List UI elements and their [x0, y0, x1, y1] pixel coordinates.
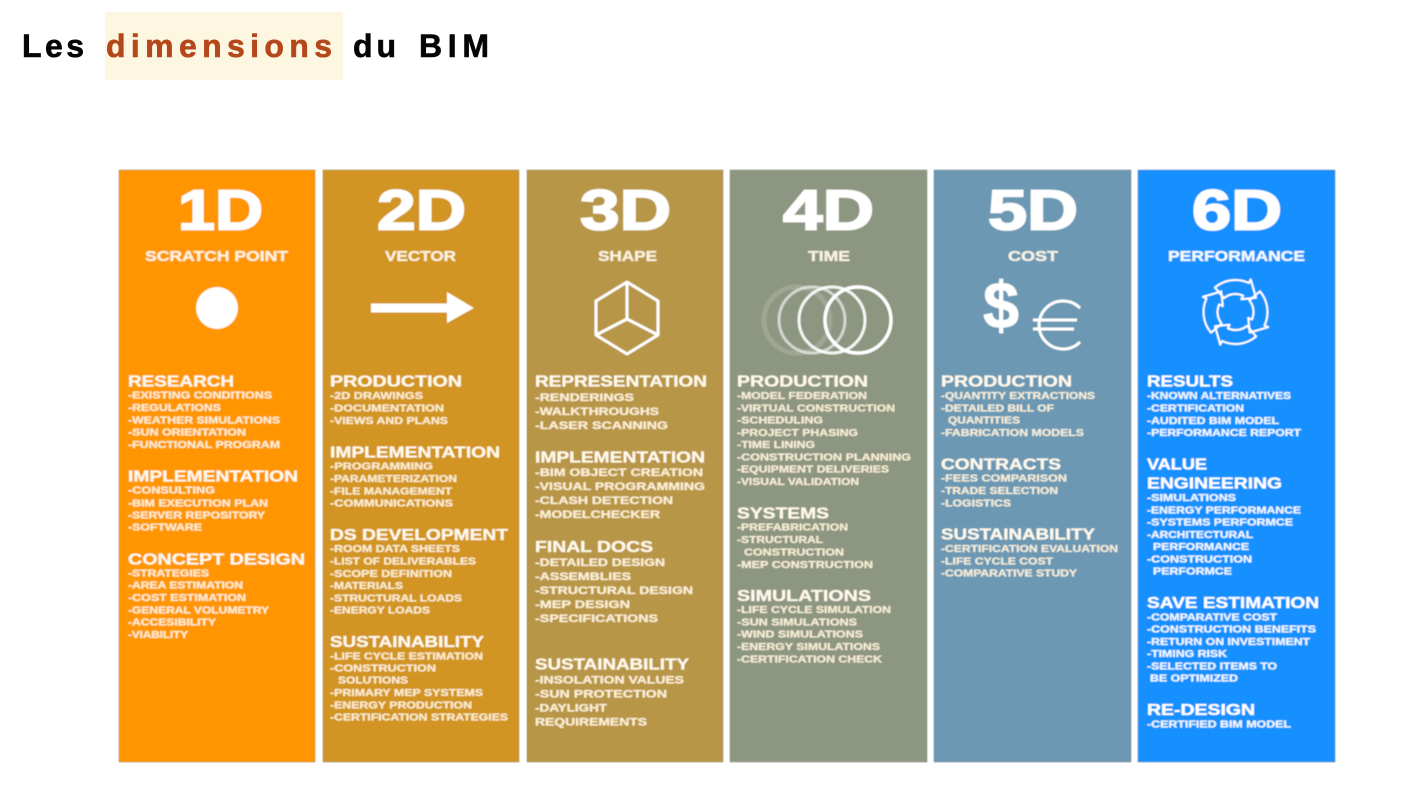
section: save estimation: -CONSTRUCTION BENEFITS — [1147, 625, 1316, 636]
panel background 4D — [730, 170, 927, 762]
section: save estimation: -TIMING RISK — [1147, 649, 1228, 660]
section: contracts: -TRADE SELECTION — [941, 486, 1058, 497]
panel: 4D time — [730, 170, 927, 762]
icon: cycle arrows — [1203, 279, 1268, 345]
section: production: -FABRICATION MODELS — [941, 428, 1084, 439]
section: sustainability: -ENERGY PRODUCTION — [330, 701, 472, 712]
section: research — [128, 374, 280, 451]
section: final docs: -ASSEMBLIES — [535, 571, 631, 583]
heading 1D: 1D — [178, 178, 263, 242]
section: value engineering: PERFORMANCE — [1153, 542, 1249, 553]
section: final docs: FINAL DOCS — [535, 539, 653, 556]
section: DS development: -SCOPE DEFINITION — [330, 569, 452, 580]
section: sustainability: SUSTAINABILITY — [535, 657, 690, 674]
icon: overlapping rings — [764, 287, 891, 353]
section: concept design: -COST ESTIMATION — [128, 593, 246, 604]
section: save estimation: -COMPARATIVE COST — [1147, 613, 1277, 624]
panel: 5D cost — [934, 170, 1131, 762]
section: DS development — [330, 527, 509, 617]
section: systems — [737, 506, 873, 571]
section: save estimation: BE OPTIMIZED — [1150, 674, 1238, 685]
section: representation: -RENDERINGS — [535, 392, 634, 404]
icon: dollar and euro — [983, 268, 1080, 349]
section: production: -2D DRAWINGS — [330, 391, 423, 402]
section: DS development: DS DEVELOPMENT — [330, 527, 509, 544]
section: production: PRODUCTION — [330, 374, 462, 391]
title word: dimensions: dimensions — [106, 28, 332, 64]
section: production: -DOCUMENTATION — [330, 404, 444, 415]
section: sustainability: REQUIREMENTS — [535, 716, 647, 728]
heading 4D: 4D — [783, 178, 874, 242]
section: implementation: -SERVER REPOSITORY — [128, 511, 265, 522]
section: simulations: -SUN SIMULATIONS — [737, 618, 857, 629]
section: implementation: -BIM EXECUTION PLAN — [128, 499, 268, 510]
section: re-design: -CERTIFIED BIM MODEL — [1147, 720, 1291, 731]
section: implementation: IMPLEMENTATION — [535, 450, 705, 467]
section: implementation — [128, 469, 298, 534]
section: contracts: -LOGISTICS — [941, 499, 1011, 510]
heading 5D: 5D — [988, 178, 1078, 242]
section: sustainability: -CERTIFICATION STRATEGIES — [330, 713, 508, 724]
section: production — [330, 374, 462, 427]
section: sustainability: -INSOLATION VALUES — [535, 674, 684, 686]
panel background 6D — [1138, 170, 1335, 762]
section: value engineering: ENGINEERING — [1147, 476, 1282, 493]
section: research: -EXISTING CONDITIONS — [128, 391, 272, 402]
section: results: RESULTS — [1147, 374, 1233, 391]
title highlight — [105, 12, 343, 80]
section: production: -VISUAL VALIDATION — [737, 477, 859, 488]
section: value engineering: -SYSTEMS PERFORMCE — [1147, 518, 1293, 529]
panel background 5D — [934, 170, 1131, 762]
section: implementation: -CONSULTING — [128, 486, 215, 497]
panel background 2D — [323, 170, 519, 762]
section: value engineering — [1147, 457, 1301, 578]
section: sustainability: -LIFE CYCLE ESTIMATION — [330, 652, 483, 663]
section: re-design — [1147, 702, 1291, 731]
subtitle scratch point: SCRATCH POINT — [145, 249, 288, 265]
subtitle vector: VECTOR — [385, 249, 457, 265]
section: sustainability — [330, 634, 508, 724]
section: production: -TIME LINING — [737, 440, 815, 451]
section: concept design: -AREA ESTIMATION — [128, 581, 243, 592]
section: implementation: -PROGRAMMING — [330, 462, 433, 473]
subtitle cost: COST — [1008, 249, 1058, 265]
section: final docs — [535, 539, 693, 625]
section: production: -QUANTITY EXTRACTIONS — [941, 391, 1095, 402]
panel background 3D — [527, 170, 723, 762]
subtitle shape: SHAPE — [598, 249, 657, 265]
section: implementation: -SOFTWARE — [128, 523, 202, 534]
panel: 3D shape — [527, 170, 723, 762]
section: production: -VIEWS AND PLANS — [330, 416, 448, 427]
section: systems: -PREFABRICATION — [737, 523, 848, 534]
section: production: -SCHEDULING — [737, 416, 823, 427]
section: sustainability: -PRIMARY MEP SYSTEMS — [330, 688, 483, 699]
icon: cube — [596, 282, 658, 354]
section: results: -CERTIFICATION — [1147, 404, 1244, 415]
section: representation — [535, 374, 707, 432]
section: sustainability: SOLUTIONS — [338, 676, 408, 687]
section: representation: -WALKTHROUGHS — [535, 406, 659, 418]
section: final docs: -MEP DESIGN — [535, 599, 630, 611]
section: production: -PROJECT PHASING — [737, 428, 858, 439]
section: DS development: -MATERIALS — [330, 581, 403, 592]
section: systems: SYSTEMS — [737, 506, 829, 523]
section: implementation — [330, 445, 500, 510]
section: sustainability: -CERTIFICATION EVALUATION — [941, 544, 1118, 555]
section: sustainability: -SUN PROTECTION — [535, 688, 667, 700]
section: production: -DETAILED BILL OF — [941, 404, 1054, 415]
section: save estimation: SAVE ESTIMATION — [1147, 595, 1319, 612]
section: representation: -LASER SCANNING — [535, 420, 668, 432]
section: results — [1147, 374, 1301, 439]
section: DS development: -ROOM DATA SHEETS — [330, 544, 460, 555]
section: re-design: RE-DESIGN — [1147, 702, 1255, 719]
section: final docs: -SPECIFICATIONS — [535, 613, 658, 625]
section: systems: -STRUCTURAL — [737, 535, 823, 546]
section: sustainability: -CONSTRUCTION — [330, 664, 436, 675]
section: sustainability: SUSTAINABILITY — [941, 527, 1096, 544]
section: concept design: -GENERAL VOLUMETRY — [128, 606, 269, 617]
section: research: -WEATHER SIMULATIONS — [128, 416, 280, 427]
section: implementation: -MODELCHECKER — [535, 509, 660, 521]
section: sustainability: -LIFE CYCLE COST — [941, 557, 1053, 568]
section: DS development: -STRUCTURAL LOADS — [330, 594, 462, 605]
section: concept design: CONCEPT DESIGN — [128, 552, 305, 569]
section: contracts — [941, 457, 1067, 510]
section: research: -FUNCTIONAL PROGRAM — [128, 440, 280, 451]
section: DS development: -ENERGY LOADS — [330, 606, 430, 617]
section: production: -EQUIPMENT DELIVERIES — [737, 465, 889, 476]
section: sustainability — [941, 527, 1118, 580]
subtitle performance: PERFORMANCE — [1168, 249, 1305, 265]
section: sustainability: SUSTAINABILITY — [330, 634, 485, 651]
section: simulations — [737, 588, 891, 666]
section: value engineering: -ENERGY PERFORMANCE — [1147, 506, 1301, 517]
section: sustainability — [535, 657, 690, 728]
section: production — [941, 374, 1095, 439]
section: representation: REPRESENTATION — [535, 374, 707, 391]
heading 2D: 2D — [377, 178, 466, 242]
section: simulations: -WIND SIMULATIONS — [737, 630, 863, 641]
title word: Les: Les — [22, 28, 84, 64]
panel: 6D performance — [1138, 170, 1335, 762]
title word: BIM: BIM — [419, 28, 489, 64]
section: simulations: -CERTIFICATION CHECK — [737, 655, 883, 666]
panel: 1D scratch point — [119, 170, 315, 762]
section: implementation: -BIM OBJECT CREATION — [535, 467, 703, 479]
section: production: -MODEL FEDERATION — [737, 391, 867, 402]
section: results: -PERFORMANCE REPORT — [1147, 428, 1301, 439]
section: results: -KNOWN ALTERNATIVES — [1147, 391, 1291, 402]
section: save estimation — [1147, 595, 1319, 685]
panel: 2D vector — [323, 170, 519, 762]
section: production: QUANTITIES — [948, 416, 1020, 427]
section: concept design: -ACCESIBILITY — [128, 618, 216, 629]
section: implementation: -COMMUNICATIONS — [330, 499, 453, 510]
section: simulations: -LIFE CYCLE SIMULATION — [737, 605, 891, 616]
section: value engineering: -CONSTRUCTION — [1147, 555, 1252, 566]
section: implementation: IMPLEMENTATION — [128, 469, 298, 486]
section: value engineering: PERFORMCE — [1153, 567, 1232, 578]
panel background 1D — [119, 170, 315, 762]
section: sustainability: -COMPARATIVE STUDY — [941, 569, 1077, 580]
section: contracts: CONTRACTS — [941, 457, 1061, 474]
section: systems: CONSTRUCTION — [744, 548, 844, 559]
section: concept design: -VIABILITY — [128, 630, 188, 641]
title — [22, 12, 489, 80]
icon: point — [196, 287, 238, 329]
section: research: -REGULATIONS — [128, 403, 221, 414]
section: save estimation: -RETURN ON INVESTIMENT — [1147, 637, 1310, 648]
section: implementation — [535, 450, 705, 521]
section: DS development: -LIST OF DELIVERABLES — [330, 557, 476, 568]
section: final docs: -DETAILED DESIGN — [535, 557, 665, 569]
icon: arrow — [371, 292, 474, 323]
title word: du: du — [353, 28, 396, 64]
section: sustainability: -DAYLIGHT — [535, 702, 607, 714]
section: final docs: -STRUCTURAL DESIGN — [535, 585, 693, 597]
section: implementation: -CLASH DETECTION — [535, 495, 673, 507]
subtitle time: TIME — [808, 249, 850, 265]
heading 6D: 6D — [1192, 178, 1282, 242]
section: value engineering: VALUE — [1147, 457, 1207, 474]
section: implementation: IMPLEMENTATION — [330, 445, 500, 462]
section: implementation: -VISUAL PROGRAMMING — [535, 481, 705, 493]
section: research: RESEARCH — [128, 374, 234, 391]
section: value engineering: -SIMULATIONS — [1147, 493, 1236, 504]
section: results: -AUDITED BIM MODEL — [1147, 416, 1279, 427]
section: value engineering: -ARCHITECTURAL — [1147, 530, 1253, 541]
section: concept design — [128, 552, 305, 641]
section: production: PRODUCTION — [941, 374, 1072, 391]
section: concept design: -STRATEGIES — [128, 569, 209, 580]
section: production: -VIRTUAL CONSTRUCTION — [737, 404, 895, 415]
icon: dollar and euro: $ — [983, 268, 1019, 342]
section: implementation: -FILE MANAGEMENT — [330, 487, 452, 498]
section: simulations: SIMULATIONS — [737, 588, 871, 605]
section: production: -CONSTRUCTION PLANNING — [737, 453, 911, 464]
section: implementation: -PARAMETERIZATION — [330, 474, 457, 485]
section: contracts: -FEES COMPARISON — [941, 474, 1067, 485]
heading 3D: 3D — [580, 178, 671, 242]
section: save estimation: -SELECTED ITEMS TO — [1147, 662, 1277, 673]
section: production — [737, 374, 911, 488]
section: systems: -MEP CONSTRUCTION — [737, 560, 873, 571]
section: research: -SUN ORIENTATION — [128, 428, 246, 439]
section: simulations: -ENERGY SIMULATIONS — [737, 642, 880, 653]
section: production: PRODUCTION — [737, 374, 868, 391]
